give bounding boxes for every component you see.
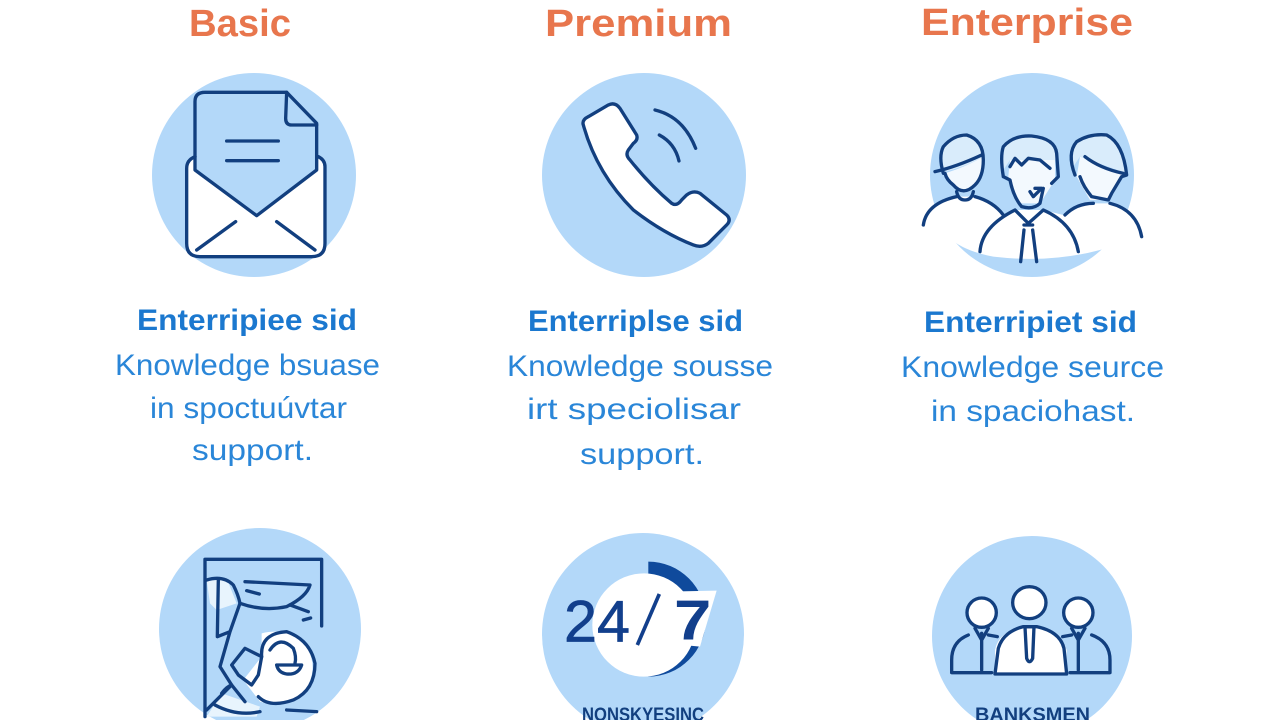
- text block: Basic description: in spoctuúvtar: [150, 392, 347, 425]
- icon: envelope with letter: [152, 73, 356, 277]
- text block: Premium description: support.: [580, 438, 704, 471]
- heading: Premium: Premium: [545, 3, 732, 45]
- text block: Premium description: irt speciolisar: [527, 393, 741, 426]
- column: Enterprise: [901, 2, 1164, 720]
- text block: Enterprise description: Enterripiet sid: [924, 306, 1137, 339]
- text block: Enterprise description: [901, 306, 1164, 428]
- icon: business team: [932, 536, 1132, 720]
- text block: Premium description: [507, 305, 773, 471]
- text block: Basic description: support.: [192, 434, 313, 467]
- icon: telephone handset: [542, 73, 746, 277]
- text block: Premium description: Knowledge sousse: [507, 350, 773, 383]
- column: Basic: [115, 3, 380, 720]
- text block: Basic description: Knowledge bsuase: [115, 349, 380, 382]
- text block: Enterprise description: in spaciohast.: [931, 395, 1135, 428]
- icon: knowledge base illustration: [159, 528, 361, 720]
- icon: 24/7 clock: 24: [564, 590, 630, 655]
- text block: Basic description: [115, 304, 380, 467]
- icon: 24/7 clock: 7: [674, 589, 711, 652]
- icon: 24/7 clock: [542, 533, 744, 720]
- text block: Premium description: Enterriplse sid: [528, 305, 743, 338]
- heading: Enterprise: Enterprise: [921, 2, 1133, 44]
- icon: three team members: [923, 73, 1142, 277]
- column: Premium: [507, 3, 773, 720]
- text block: Enterprise description: Knowledge seurce: [901, 351, 1164, 384]
- text block: Basic description: Enterripiee sid: [137, 304, 357, 337]
- heading: Basic: Basic: [189, 3, 291, 45]
